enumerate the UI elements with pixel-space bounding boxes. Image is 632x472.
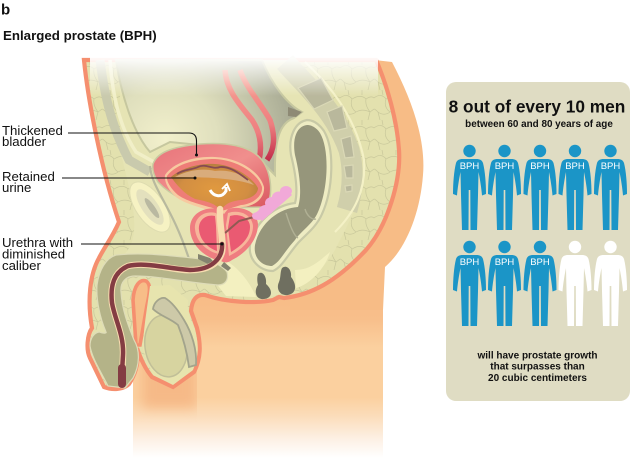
prostate — [190, 208, 258, 262]
skin finger between penis and scrotum — [133, 281, 150, 345]
label: thickened bladder: Thickened — [2, 123, 63, 138]
statistic subheading: between 60 and 80 years of age — [465, 119, 613, 130]
statistic heading: 8 out of every 10 men — [449, 96, 625, 116]
penis corpora — [90, 254, 228, 388]
BPH figure labels: BPH — [495, 161, 514, 172]
label: retained urine: Retained — [2, 169, 55, 184]
panel label: b: b — [1, 2, 10, 18]
label: retained urine: urine — [2, 180, 31, 195]
dark wedge — [288, 107, 302, 117]
thigh shadow — [142, 350, 197, 408]
BPH figure labels: BPH — [460, 257, 479, 268]
heading: Enlarged prostate (BPH): Enlarged prostate (BPH) — [3, 28, 157, 43]
BPH figure labels — [460, 161, 620, 268]
pelvic floor muscle fan — [212, 262, 256, 297]
leader: urethra — [81, 243, 222, 245]
top fade — [90, 48, 378, 96]
panel background — [446, 82, 630, 401]
thigh skin — [133, 280, 383, 458]
pictogram: white figures without BPH — [558, 241, 627, 326]
leader: retained urine — [62, 177, 195, 179]
pictogram: blue figures with BPH — [453, 145, 627, 326]
sacrum bones — [298, 78, 354, 192]
pubic bone — [122, 175, 178, 239]
inner soft tissue — [120, 60, 363, 296]
urethra — [112, 209, 222, 385]
buttock skin — [290, 60, 423, 310]
BPH figure labels: BPH — [565, 161, 585, 172]
label: urethra with diminished caliber: Urethra with — [2, 235, 73, 250]
testis — [141, 312, 191, 380]
arrow icon in urine — [210, 184, 230, 196]
BPH figure labels: BPH — [460, 161, 479, 172]
bladder outer muscle — [153, 143, 271, 208]
leader dots — [194, 154, 224, 246]
bladder wall — [165, 157, 264, 214]
epididymis — [153, 298, 196, 367]
bladder lumen: retained urine — [171, 164, 258, 209]
ureters — [225, 70, 260, 174]
body section with fat and outline — [84, 60, 399, 389]
statistic conclusion: that surpasses than — [490, 362, 585, 372]
rectum — [250, 120, 331, 271]
peritoneal cavity — [116, 60, 302, 175]
ejaculatory duct — [225, 217, 254, 233]
label: thickened bladder: bladder — [2, 134, 47, 149]
anal sphincter — [256, 273, 271, 299]
fascia around bladder — [150, 166, 190, 262]
scrotal fat — [143, 285, 198, 385]
seminal vesicle — [252, 186, 292, 221]
urine surface band — [175, 170, 254, 185]
leader: thickened bladder — [68, 133, 196, 155]
anatomical illustration — [62, 48, 423, 458]
panel: statistic — [446, 82, 630, 401]
BPH figure labels: BPH — [495, 257, 514, 268]
label: urethra with diminished caliber: diminished — [2, 246, 65, 262]
statistic conclusion: 20 cubic centimeters — [488, 373, 587, 384]
statistic conclusion: will have prostate growth — [476, 350, 598, 362]
label: urethra with diminished caliber: caliber — [2, 258, 41, 273]
perineal grey lumps — [198, 254, 231, 271]
abdominal wall muscle band — [100, 60, 150, 172]
sacral spine band — [285, 62, 352, 210]
BPH figure labels: BPH — [601, 161, 620, 172]
BPH figure labels: BPH — [530, 161, 550, 172]
mucosal fold — [177, 166, 248, 180]
BPH figure labels: BPH — [530, 257, 550, 268]
